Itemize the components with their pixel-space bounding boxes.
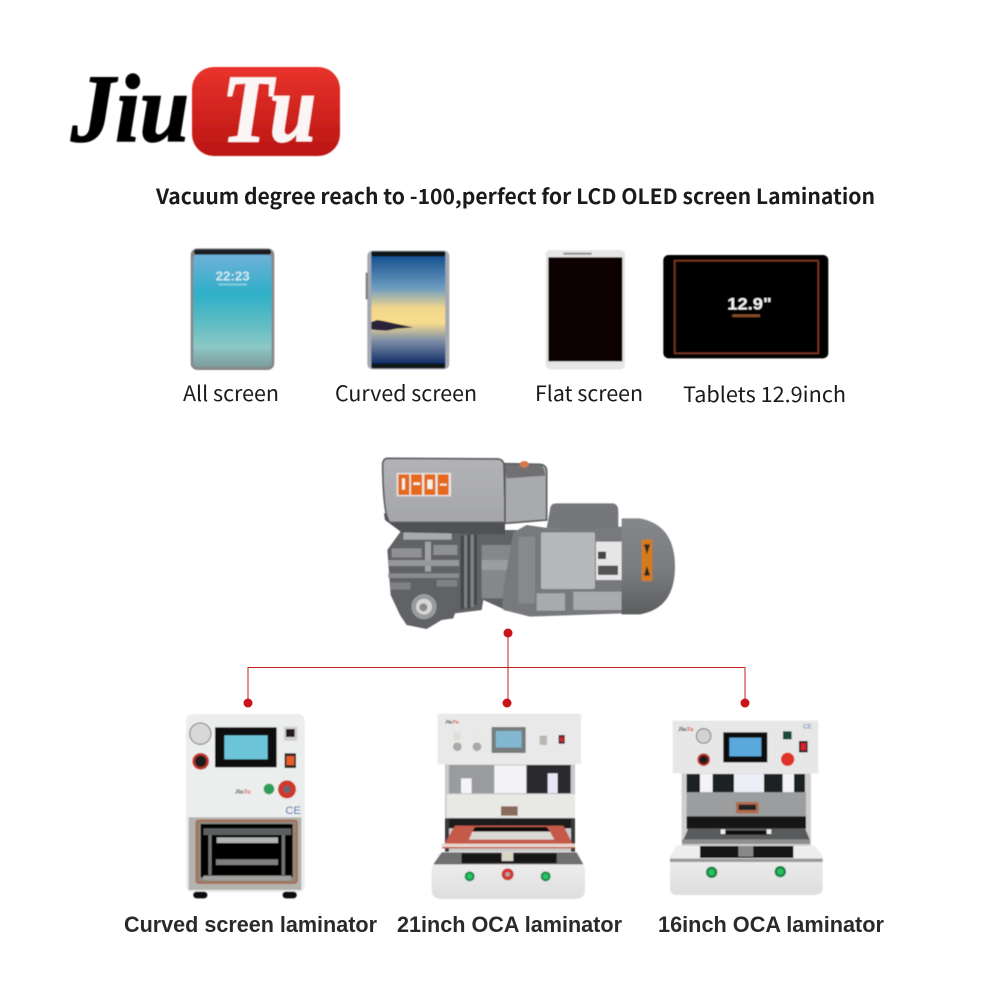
tablet size text: 12.9" (727, 294, 772, 313)
gauge (696, 729, 711, 743)
vacuum pump (383, 458, 675, 629)
machine: 16 inch OCA laminator (670, 721, 823, 895)
terminal cover (541, 532, 595, 589)
top cover lip (384, 513, 505, 534)
logo word: Tu: Tu (222, 55, 316, 162)
tablet: 12.9 inch (663, 255, 828, 358)
top cover right (505, 464, 547, 523)
caption: 21 inch OCA laminator: 21inch OCA laminator (397, 912, 622, 937)
cloud silhouette (371, 320, 413, 331)
caption: curved screen laminator: Curved screen laminator (124, 912, 377, 937)
motor fan cover (622, 518, 675, 614)
dot: pump (504, 628, 512, 638)
phone: curved screen (366, 251, 449, 369)
label: tablets: Tablets 12.9inch (683, 379, 846, 409)
orange warning label (642, 540, 652, 581)
panel controls (697, 753, 710, 766)
label: all screen: All screen (183, 378, 279, 408)
base (432, 853, 585, 899)
frame (445, 764, 575, 852)
dot: 16 inch laminator (740, 698, 750, 708)
small logo: JiuTu (234, 788, 251, 795)
logo word: Jiu: Jiu (70, 55, 189, 162)
logo badge: red rounded box (192, 67, 340, 156)
buttons (264, 784, 274, 794)
machine: 21 inch OCA laminator (432, 714, 585, 899)
pump casting silhouette (387, 530, 517, 629)
meter and switch (284, 727, 297, 741)
dot: curved laminator (244, 698, 252, 708)
connector lines (244, 628, 750, 708)
top cover left (383, 458, 505, 522)
phone: all screen (191, 248, 274, 370)
label: curved screen: Curved screen (335, 378, 477, 408)
oil port (411, 594, 437, 619)
touch screen (492, 727, 526, 753)
lower plate (683, 828, 810, 840)
logo: JiuTu (70, 55, 340, 162)
knob (192, 753, 209, 770)
frame (682, 773, 811, 846)
orange sticker (397, 473, 451, 496)
feet (193, 892, 207, 898)
caption: 16 inch OCA laminator: 16inch OCA laminator (658, 912, 884, 937)
motor rating plate (596, 542, 622, 580)
gauge (190, 723, 211, 744)
base (670, 845, 823, 895)
machine: curved screen laminator (186, 714, 305, 898)
base buttons (706, 867, 717, 878)
phone: flat screen (546, 250, 625, 369)
panel controls (453, 742, 462, 751)
label: flat screen: Flat screen (535, 378, 643, 408)
base buttons (465, 871, 475, 881)
cooling fins (461, 534, 477, 609)
motor front (503, 525, 623, 617)
small logo: JiuTu (677, 726, 694, 733)
touch screen (215, 727, 277, 767)
CE mark: CE (285, 805, 302, 817)
chamber racks (203, 828, 291, 835)
small logo: JiuTu (444, 719, 459, 725)
CE mark: CE (803, 723, 813, 730)
heading: Vacuum degree reach to -100,perfect for LCD OLED screen Lamination (155, 181, 875, 211)
screen clock: 22:23 (216, 269, 250, 284)
dot: 21 inch laminator (502, 698, 512, 708)
red platen (442, 826, 575, 848)
top panel (438, 714, 581, 764)
top panel (673, 721, 818, 773)
touch screen (723, 732, 767, 762)
motor capacitor (547, 503, 618, 528)
upper plate (687, 792, 806, 816)
